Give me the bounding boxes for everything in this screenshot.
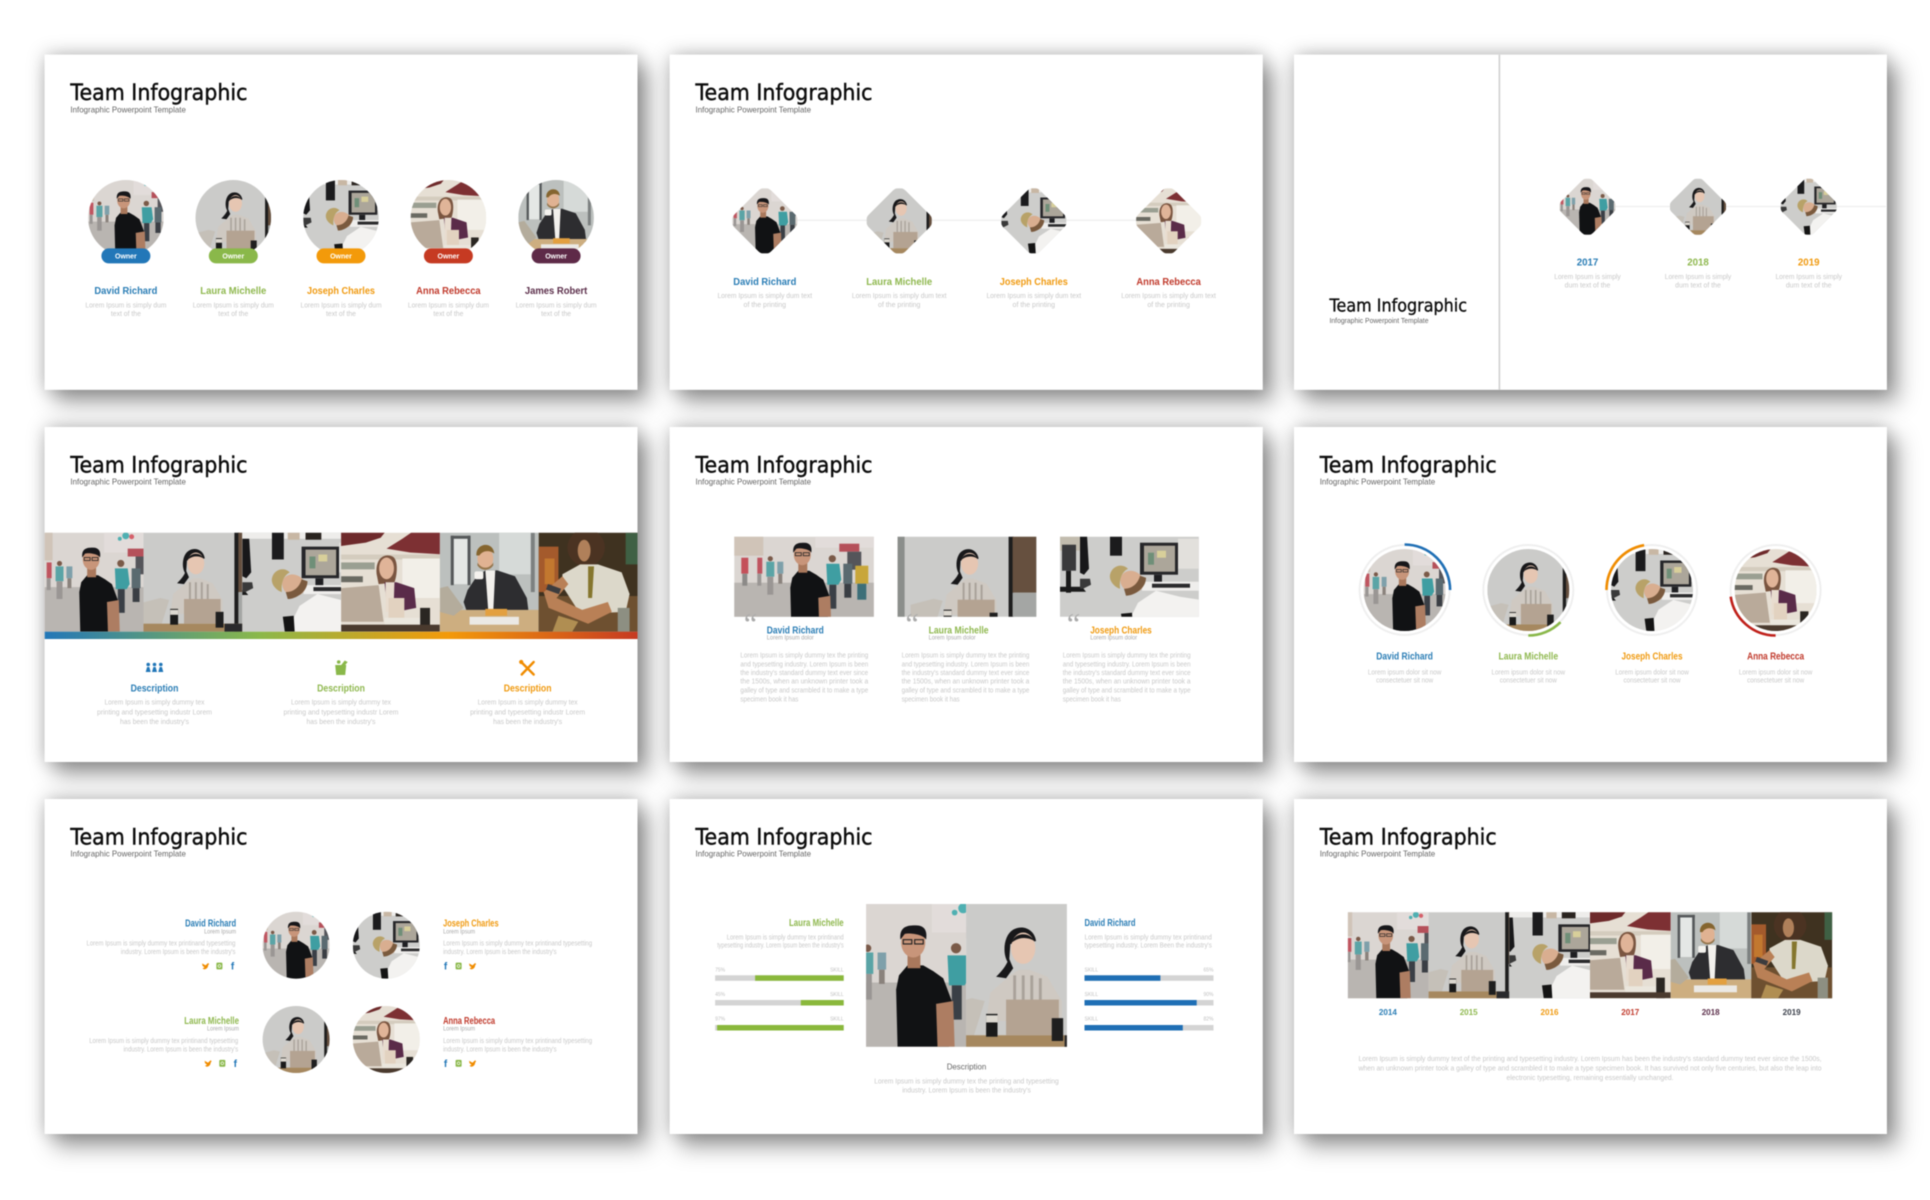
testimonial: Laura Michelle: and typesetting industry. Lorem Ipsum is been [902,659,1029,668]
icon: twitter [202,963,209,969]
member: David Richard: Owner [115,253,137,260]
timeline item 2019: dum text of the [1786,281,1832,290]
member: Laura Michelle [1482,544,1574,683]
timeline item 2017 [1554,178,1621,288]
skills: David Richard: typesetting industry. Lorem Been the industry's [1084,941,1212,950]
photo: Joseph Charles [352,911,420,980]
skills: Laura Michelle: typesetting industry. Lorem Ipsum been the industry's [717,941,844,950]
title: Team Infographic [695,825,872,850]
member: James Robert: Owner [545,253,567,260]
description column 1: printing and typesetting industr Lorem [97,707,212,716]
description column 3: Description [504,683,551,695]
member: Laura Michelle: Laura Michelle [200,285,266,297]
icon: facebook: f [444,962,448,972]
bar 97%: 97% [715,1017,726,1023]
description column 1: has been the industry's [120,717,189,726]
card background [45,427,637,762]
testimonial: Joseph Charles: Lorem Ipsum is simply dummy tex the printing [1063,651,1191,660]
description column 3: printing and typesetting industr Lorem [470,707,585,716]
testimonial: David Richard: galley of type and scrambled it to make a type [740,685,868,694]
testimonial: Laura Michelle: the industry's standard dummy text ever since [902,668,1029,677]
skills: Laura Michelle: Laura Michelle [789,917,844,929]
bio: David Richard [87,918,236,972]
member: Anna Rebecca: text of the [433,309,463,318]
icon: twitter [205,1060,212,1067]
description block [874,1062,1059,1095]
testimonial: David Richard: the 1500s, when an unknown printer took a [740,677,868,686]
bio: Anna Rebecca: Lorem Ipsum is simply dummy tex printinand typesetting [443,1036,592,1045]
timeline item 2017: 2017 [1577,256,1598,268]
slide: team diamonds on a connector line [670,55,1263,390]
testimonial: Laura Michelle: galley of type and scrambled it to make a type [902,685,1029,694]
member: Joseph Charles: of the printing [1013,300,1055,309]
bio: Anna Rebecca: Lorem Ipsum [443,1026,475,1033]
icon: facebook: f [231,962,235,972]
description column 2: Lorem Ipsum is simply dummy tex [291,697,391,706]
member: Laura Michelle: text of the [218,309,248,318]
member: Joseph Charles [300,180,382,316]
testimonial: David Richard: the industry's standard dummy text ever since [740,668,868,677]
member: David Richard: David Richard [733,276,796,288]
testimonial: Laura Michelle: Laura Michelle [929,624,989,636]
bio: Laura Michelle: Lorem Ipsum [207,1026,239,1033]
member: James Robert: James Robert [525,285,588,297]
card background [670,799,1263,1134]
member: Laura Michelle: consectetuer sit now [1500,675,1557,684]
testimonial: Laura Michelle: “ [906,608,919,640]
bio: Joseph Charles: Lorem Ipsum is simply dummy tex printinand typesetting [443,939,592,948]
description column 2 [284,660,399,726]
timeline item 2018: dum text of the [1675,281,1721,290]
subtitle: Infographic Powerpoint Template [695,477,811,487]
card background [45,55,637,390]
bar 45%: 45% [715,992,726,998]
subtitle: Infographic Powerpoint Template [695,849,811,859]
member: Joseph Charles [986,188,1081,309]
testimonial: Joseph Charles: specimen book it has [1063,694,1121,703]
bio: David Richard: Lorem Ipsum is simply dummy tex printinand typesetting [87,939,236,948]
skills: David Richard [1084,917,1214,1030]
member: Anna Rebecca: of the printing [1147,300,1190,309]
bar 90%: SKILL [1084,992,1098,998]
testimonial: David Richard: and typesetting industry. Lorem Ipsum is been [740,659,868,668]
bar 65%: 65% [1203,967,1214,973]
icon: instagram [219,1060,225,1067]
bar 97% [715,1017,844,1030]
connector line [1587,206,1886,207]
member: Laura Michelle: of the printing [878,300,920,309]
icon: instagram [216,963,222,969]
member: Anna Rebecca: Owner [438,253,460,260]
member: Laura Michelle: Laura Michelle [1498,650,1558,662]
slide: circular photos with progress arcs [1294,427,1887,762]
bio: Joseph Charles: Lorem Ipsum [443,928,475,935]
description column 2: printing and typesetting industr Lorem [283,707,399,716]
bar 65%: SKILL [1084,967,1098,973]
bio: Joseph Charles: industry. Lorem Ipsum is been the industry's [443,947,557,956]
icon: facebook: f [234,1059,238,1070]
member: David Richard: Lorem Ipsum is simply dum text [717,291,812,300]
subtitle: Infographic Powerpoint Template [1320,849,1435,859]
icon: people [146,663,163,672]
member: Joseph Charles: Lorem Ipsum is simply dum text [986,291,1081,300]
body paragraph [1358,1054,1822,1082]
bio: David Richard: David Richard [185,918,236,930]
bar 75% [715,967,844,981]
central photo pair [761,890,1176,1061]
bar 90% [1084,992,1214,1006]
member: Anna Rebecca: Anna Rebecca [416,285,481,297]
testimonial: Laura Michelle: the 1500s, when an unknown printer took a [902,677,1029,686]
photo: Anna Rebecca [352,1006,420,1074]
member: Joseph Charles: Lorem Ipsum is simply dum [300,300,381,309]
bio: Anna Rebecca: industry. Lorem Ipsum is been the industry's [443,1044,557,1053]
body paragraph: electronic typesetting, remaining essentially unchanged. [1506,1073,1674,1082]
card background [1294,799,1887,1134]
subtitle: Infographic Powerpoint Template [70,477,186,487]
testimonial: David Richard: Lorem Ipsum dolor [767,634,815,641]
testimonial: Joseph Charles: and typesetting industry. Lorem Ipsum is been [1063,659,1191,668]
member: Laura Michelle: Laura Michelle [866,276,932,288]
year labels: 2018 [1702,1007,1720,1017]
description column 1: Description [131,683,178,695]
bio: Joseph Charles [443,918,592,972]
icon: tools [520,661,534,674]
bar 65% [1084,967,1214,981]
bar 45% [715,992,844,1006]
member: Joseph Charles: Joseph Charles [1000,276,1068,288]
testimonial: Joseph Charles: Joseph Charles [1090,624,1152,636]
title: Team Infographic [695,81,872,106]
subtitle: Infographic Powerpoint Template [1330,316,1428,325]
bar 82%: 82% [1203,1017,1214,1023]
member: David Richard: David Richard [94,285,157,297]
member: David Richard: text of the [111,309,141,318]
bar 90%: 90% [1203,992,1214,998]
member: David Richard [86,180,166,316]
member: David Richard: Lorem Ipsum is simply dum [85,300,166,309]
card background [1294,55,1887,390]
skills: Laura Michelle [715,917,844,1030]
member: David Richard [1358,542,1452,683]
title: Team Infographic [69,81,247,106]
testimonial: Joseph Charles: galley of type and scrambled it to make a type [1063,685,1191,694]
testimonial: Joseph Charles: Lorem Ipsum dolor [1090,634,1138,641]
member: Laura Michelle: Lorem Ipsum is simply dum [193,300,274,309]
skills: David Richard: David Richard [1084,917,1136,929]
bio: Laura Michelle [89,1015,239,1070]
bio: David Richard: industry. Lorem Ipsum is been the industry's [121,947,236,956]
bio: David Richard: Lorem Ipsum [204,928,236,935]
member: James Robert: Lorem Ipsum is simply dum [516,300,597,309]
bar 82%: SKILL [1084,1017,1098,1023]
member: Joseph Charles: consectetuer sit now [1624,675,1681,684]
bar 45%: SKILL [830,992,844,998]
subtitle: Infographic Powerpoint Template [70,849,186,859]
member: Joseph Charles: text of the [326,309,356,318]
testimonial: David Richard: “ [744,608,757,640]
icon: twitter [469,963,476,969]
timeline item 2017: Lorem Ipsum is simply [1554,272,1621,281]
slide: skills bars around central photos [670,799,1263,1134]
testimonial: David Richard: Lorem Ipsum is simply dummy tex the printing [740,651,868,660]
member: Anna Rebecca: Lorem Ipsum is simply dum text [1121,291,1216,300]
title: Team Infographic [695,453,872,478]
description column 3: Lorem Ipsum is simply dummy tex [478,697,578,706]
title: Team Infographic [1329,297,1467,317]
member: Laura Michelle [852,188,946,309]
member: Anna Rebecca: consectetuer sit now [1747,675,1805,684]
description column 3: has been the industry's [493,717,562,726]
icon: facebook: f [444,1059,448,1070]
description block: industry. Lorem Ipsum is been the industry's [902,1086,1031,1095]
testimonial: Joseph Charles: “ [1067,608,1080,640]
timeline item 2018: 2018 [1687,256,1709,268]
member: Laura Michelle: Owner [222,253,244,260]
bio: Anna Rebecca [443,1015,592,1070]
slide: year photo timeline [1294,799,1887,1134]
skills: Laura Michelle: Lorem Ipsum is simply dummy tex printinand [727,932,844,941]
member: Joseph Charles: Joseph Charles [1622,650,1683,662]
member: Anna Rebecca: Anna Rebecca [1747,650,1804,662]
member: Anna Rebecca [1728,544,1822,683]
year labels: 2019 [1783,1007,1801,1017]
card background [1294,427,1887,762]
photo strip [1294,904,1839,1007]
description column 2: has been the industry's [306,717,376,726]
description block: Description [947,1062,986,1071]
timeline item 2017: dum text of the [1565,281,1610,290]
body paragraph: Lorem Ipsum is simply dummy text of the printing and typesetting industry. Lorem Ipsum has been the industry's standard dummy text ever since the 1500s, [1358,1054,1822,1063]
member: Joseph Charles: Owner [330,253,352,260]
photo: Laura Michelle [262,1006,330,1074]
timeline item 2019 [1776,178,1842,288]
bar 82% [1084,1017,1214,1030]
icon: instagram [456,1060,462,1067]
member: Joseph Charles: Joseph Charles [307,285,375,297]
photo strip [0,523,642,641]
description column 1: Lorem Ipsum is simply dummy tex [105,697,205,706]
member: Anna Rebecca [408,180,489,316]
member: Joseph Charles [1604,543,1698,683]
member: Joseph Charles: Lorem ipsum dolor sit now [1615,667,1689,676]
member: Laura Michelle: Lorem ipsum dolor sit now [1492,667,1566,676]
bio: Laura Michelle: industry. Lorem Ipsum is been the industry's [123,1044,239,1053]
member: David Richard: of the printing [744,300,786,309]
testimonial: Laura Michelle: Lorem Ipsum dolor [929,634,976,641]
member: David Richard: Lorem ipsum dolor sit now [1368,667,1442,676]
card background [45,799,637,1134]
member: David Richard: David Richard [1376,650,1433,662]
gradient bar [45,632,637,639]
description column 3 [470,661,585,726]
member: James Robert [516,180,596,316]
title: Team Infographic [1319,825,1497,850]
bar 75%: 75% [715,967,726,973]
slide: testimonial photo cards [670,427,1263,762]
skills: David Richard: Lorem Ipsum is simply dummy tex printinand [1084,932,1212,941]
description column 2: Description [317,683,365,695]
icon: instagram [456,963,462,969]
subtitle: Infographic Powerpoint Template [1320,477,1435,487]
member: Anna Rebecca: Anna Rebecca [1136,276,1201,288]
bio: Anna Rebecca: Anna Rebecca [443,1015,495,1027]
testimonial: Laura Michelle: Lorem Ipsum is simply dummy tex the printing [902,651,1029,660]
subtitle: Infographic Powerpoint Template [70,104,186,114]
year labels: 2014 [1379,1007,1397,1017]
subtitle: Infographic Powerpoint Template [695,104,811,114]
slide: photo strip with gradient bar [0,427,642,762]
member: David Richard: consectetuer sit now [1376,675,1434,684]
testimonial: Joseph Charles [1020,519,1240,703]
testimonial: David Richard: David Richard [767,624,824,636]
bar 75%: SKILL [830,967,844,973]
testimonial: Laura Michelle: specimen book it has [902,694,960,703]
connector line [765,220,1169,221]
timeline item 2018: Lorem Ipsum is simply [1665,272,1732,281]
year labels: 2015 [1460,1007,1478,1017]
bio: Laura Michelle: Laura Michelle [184,1015,239,1027]
icon: twitter [469,1060,476,1067]
year labels [1379,1007,1801,1017]
title: Team Infographic [69,453,247,478]
photo: David Richard [262,911,330,980]
testimonial: Joseph Charles: the industry's standard dummy text ever since [1063,668,1191,677]
icon: plant [335,660,348,675]
bio: Joseph Charles: Joseph Charles [443,918,499,930]
card background [670,55,1263,390]
body paragraph: when an unknown printer took a galley of type and scrambled it to make a type specimen book. It has survived not only five centuries, but also the leap into [1358,1063,1822,1072]
member: Laura Michelle [192,180,274,316]
timeline item 2019: Lorem Ipsum is simply [1775,272,1842,281]
description block: Lorem Ipsum is simply dummy tex the printing and typesetting [874,1076,1059,1085]
testimonial: Joseph Charles: the 1500s, when an unknown printer took a [1063,677,1191,686]
bar 97%: SKILL [830,1017,844,1023]
timeline item 2019: 2019 [1798,256,1820,268]
member: Anna Rebecca [1121,188,1216,309]
testimonial: David Richard: specimen book it has [740,694,799,703]
slide: team circles with owner badges [43,55,639,390]
slide: timeline with left title column [1294,55,1887,390]
year labels: 2016 [1540,1007,1559,1017]
card background [670,427,1263,762]
testimonial: Laura Michelle [857,523,1077,703]
title: Team Infographic [1319,453,1497,478]
member: James Robert: text of the [541,309,571,318]
timeline item 2018 [1664,178,1732,288]
year labels: 2017 [1621,1007,1640,1017]
description column 1 [97,663,212,726]
testimonial: David Richard [695,518,915,703]
bio: Laura Michelle: Lorem Ipsum is simply dummy tex printinand typesetting [89,1036,238,1045]
member: Laura Michelle: Lorem Ipsum is simply dum text [852,291,947,300]
slide: team with social icons [45,799,637,1134]
member: David Richard [718,188,812,309]
title: Team Infographic [69,825,247,850]
member: Anna Rebecca: Lorem ipsum dolor sit now [1739,667,1813,676]
member: Anna Rebecca: Lorem Ipsum is simply dum [408,300,489,309]
